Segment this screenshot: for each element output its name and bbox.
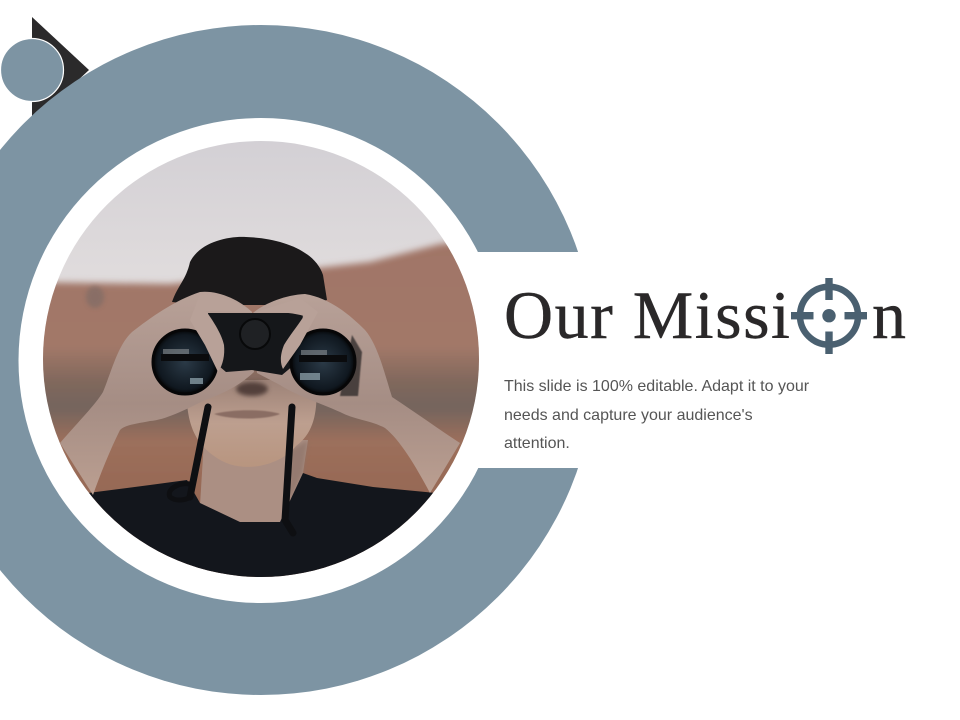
body text: attention.: [504, 435, 570, 452]
ring gap: white opening: [470, 252, 610, 468]
hair: [172, 237, 327, 305]
binoculars: [153, 313, 362, 396]
body text: needs and capture your audience's: [504, 407, 753, 424]
icon: target crosshair replacing the letter o: [791, 278, 867, 354]
neck straps: [169, 407, 293, 533]
finger overlays: [196, 312, 252, 372]
left arm and hand: [60, 292, 254, 495]
heading: Our Mission: n: [872, 277, 908, 353]
left lens: [153, 330, 217, 394]
inner white circle: [18, 118, 504, 603]
ring: large blue-grey circle: [0, 25, 596, 695]
badge: small circle: [0, 38, 64, 102]
right lens: [291, 330, 355, 394]
face and neck: [186, 380, 317, 524]
photo: man with binoculars: [43, 141, 479, 577]
right arm and hand: [253, 294, 460, 493]
body text: [504, 378, 809, 452]
photo background: sky and hills: [43, 141, 479, 577]
shirt: [89, 473, 434, 577]
badge: dark triangle: [32, 17, 89, 123]
body text: This slide is 100% editable. Adapt it to your: [504, 378, 809, 395]
heading: Our Mission: Our Missi: [504, 277, 791, 353]
